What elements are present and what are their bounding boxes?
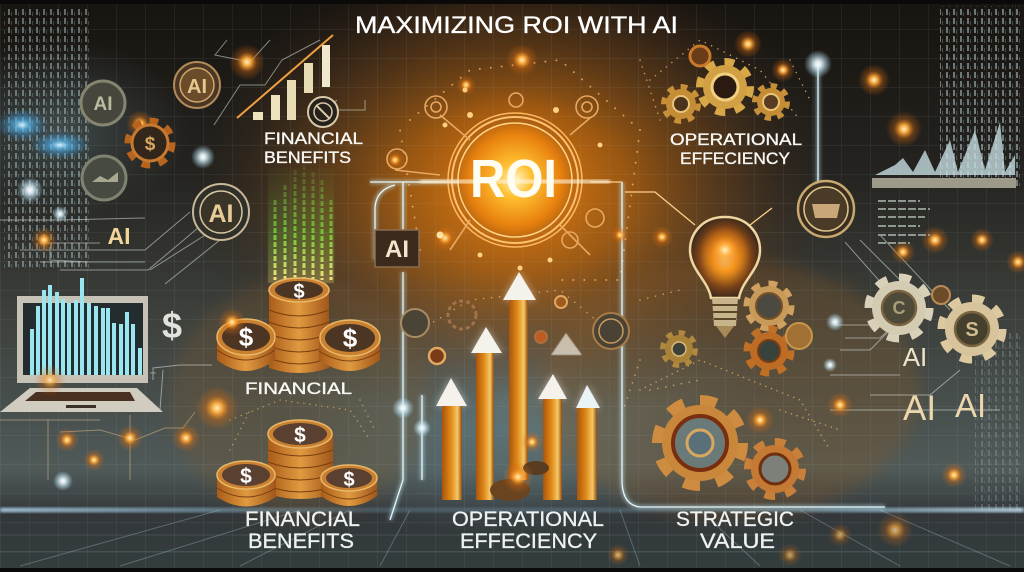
- gear: large: [658, 401, 742, 485]
- badge: gold AI top: AI: [187, 76, 207, 98]
- heading: strategic value: [676, 508, 794, 553]
- coin stack: tall: [268, 420, 333, 499]
- ROI core: ROI: [470, 149, 557, 209]
- gears: operational efficiency top: [664, 46, 787, 121]
- labels: AI right side: AI: [903, 342, 927, 372]
- labels: AI right side: [903, 342, 986, 428]
- neon connector lines: [370, 65, 885, 520]
- heading: financial benefits (bottom): BENEFITS: [248, 530, 354, 553]
- coin stack: tall: $: [293, 281, 305, 303]
- coin: left: [217, 461, 276, 506]
- badge: orange dollar gear: [128, 121, 172, 165]
- floor lines and sparks: [0, 510, 1024, 566]
- rising arrows chart: [436, 272, 600, 501]
- coin: right: $: [343, 469, 355, 491]
- heading: financial benefits (bottom): FINANCIAL: [245, 508, 360, 531]
- coin: left: $: [239, 322, 254, 352]
- heading: operational efficiency (bottom): EFFECIENCY: [460, 530, 597, 553]
- arrow 5: [538, 374, 567, 500]
- arrow 4 faded: [551, 333, 582, 355]
- heading: financial benefits (top): FINANCIAL: [264, 129, 363, 148]
- laptop bars: [30, 278, 142, 375]
- arrow 3 tall: [503, 272, 536, 480]
- badge: grey AI: [81, 81, 125, 125]
- coin: left: $: [240, 465, 252, 488]
- gears: strategic value: [658, 401, 802, 496]
- coin stack: tall: [269, 278, 329, 373]
- horizontal light flare: [0, 508, 1024, 512]
- dollar sign: $: [162, 305, 182, 346]
- green data stream: [268, 165, 334, 283]
- badge: gold AI top: [174, 62, 220, 108]
- badge: magnifier icon: [798, 181, 854, 237]
- icon: light bulb: [690, 217, 760, 338]
- coin: right: $: [343, 323, 358, 353]
- heading: operational efficiency (top): [670, 130, 802, 168]
- badge: gold AI lower: AI: [208, 200, 234, 228]
- coin stack: tall: $: [294, 424, 306, 447]
- gears: silver AI gears: [869, 278, 1002, 359]
- gear: small: [748, 442, 802, 496]
- AI box: [375, 230, 419, 267]
- title: MAXIMIZING ROI WITH AI: [355, 12, 678, 39]
- arrow 1: [436, 378, 467, 500]
- AI box: AI: [385, 236, 409, 263]
- coin: left: [217, 319, 275, 371]
- small badges near arrows: [401, 296, 629, 364]
- gears: silver AI gears: S: [965, 319, 979, 341]
- heading: strategic value: STRATEGIC: [676, 508, 794, 531]
- heading: strategic value: VALUE: [700, 530, 775, 553]
- label: AI gold: AI: [108, 223, 130, 249]
- heading: operational efficiency (bottom): OPERATIONAL: [452, 508, 604, 531]
- financial growth chart: [237, 35, 338, 127]
- gold particle dust: [230, 40, 840, 450]
- coins: lower stack: [217, 420, 377, 506]
- badge: orange dollar gear: $: [145, 134, 156, 155]
- coin: right: [319, 320, 380, 371]
- badge: grey chart: [82, 156, 126, 200]
- heading: financial benefits (top): [264, 129, 363, 167]
- gears: silver AI gears: C: [892, 298, 906, 318]
- arrow 2: [471, 327, 502, 500]
- labels: AI right side: AI: [955, 387, 986, 424]
- ROI core: [420, 85, 610, 275]
- heading: operational efficiency (bottom): [452, 508, 604, 553]
- gears: mid cluster: [663, 284, 812, 373]
- rubble and glow at base: [490, 431, 549, 501]
- badge: gold AI lower: [193, 184, 249, 240]
- badge: grey AI: AI: [94, 94, 112, 115]
- circuit lines: [0, 40, 1000, 480]
- heading: financial: FINANCIAL: [245, 379, 352, 398]
- labels: AI right side: AI: [903, 389, 936, 428]
- heading: financial benefits (top): BENEFITS: [264, 148, 351, 167]
- icon cluster: small rings around ROI: [387, 88, 604, 270]
- arrow tip halos: [436, 272, 600, 408]
- coin: right: [321, 465, 377, 506]
- arrow 6: [576, 385, 600, 500]
- heading: operational efficiency (top): OPERATIONAL: [670, 130, 802, 149]
- area chart and data panel: [872, 122, 1016, 243]
- heading: operational efficiency (top): EFFECIENCY: [680, 149, 790, 168]
- coins: upper stack: [217, 278, 380, 373]
- heading: financial benefits (bottom): [245, 508, 360, 553]
- icon: laptop with bar chart: [0, 278, 163, 412]
- icon: AI badges and coins, upper left: [81, 62, 249, 240]
